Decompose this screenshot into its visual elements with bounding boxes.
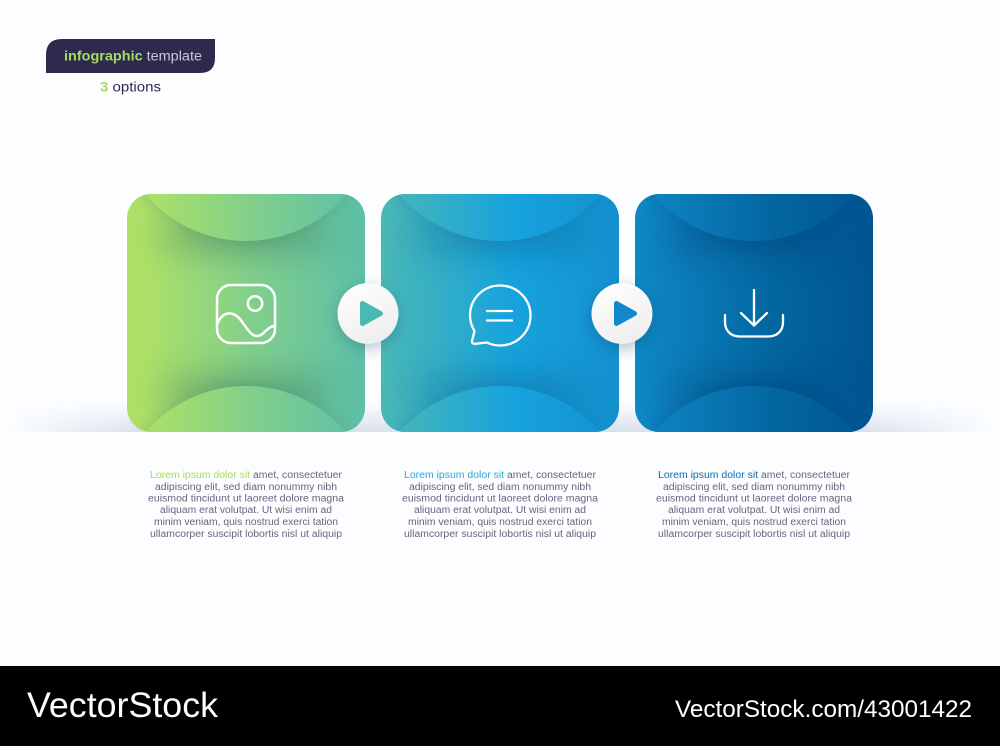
text block 2: aliquam erat volutpat. Ut wisi enim ad	[414, 505, 586, 516]
icon: chat bubble	[470, 286, 530, 346]
text block 3: adipiscing elit, sed diam nonummy nibh	[663, 482, 845, 493]
text block 2	[402, 470, 599, 540]
header badge	[46, 39, 215, 73]
text block 3: aliquam erat volutpat. Ut wisi enim ad	[668, 505, 840, 516]
subtitle: 3 options: 3 options	[100, 80, 161, 94]
text block 2: adipiscing elit, sed diam nonummy nibh	[409, 482, 591, 493]
text block 1: ullamcorper suscipit lobortis nisl ut aliquip	[150, 529, 343, 540]
text block 1: euismod tincidunt ut laoreet dolore magna	[148, 494, 345, 504]
text block 3: ullamcorper suscipit lobortis nisl ut aliquip	[658, 529, 851, 540]
icon: download	[725, 290, 783, 336]
footer logo: VectorStock	[27, 686, 219, 725]
floor shadow	[41, 411, 959, 432]
text block 1: minim veniam, quis nostrud exerci tation	[154, 517, 338, 528]
arrow button 2	[591, 283, 653, 349]
text block 2: euismod tincidunt ut laoreet dolore magna	[402, 494, 599, 504]
panel: card 2 chat	[381, 194, 619, 432]
text block 1	[148, 470, 345, 540]
panel: card 3 download	[635, 194, 873, 432]
icon: play 2	[616, 304, 634, 324]
icon: play 1	[362, 304, 380, 324]
arrow button 1	[337, 283, 399, 349]
text block 3: euismod tincidunt ut laoreet dolore magna	[656, 494, 853, 504]
footer bar	[0, 666, 1000, 746]
text block 3: Lorem ipsum dolor sit amet, consectetuer	[658, 470, 851, 481]
text block 1: Lorem ipsum dolor sit amet, consectetuer	[150, 470, 343, 481]
text block 1: aliquam erat volutpat. Ut wisi enim ad	[160, 505, 332, 516]
icon: image	[217, 285, 275, 343]
panel: card 1 image	[127, 194, 365, 432]
text block 2: minim veniam, quis nostrud exerci tation	[408, 517, 592, 528]
text block 2: Lorem ipsum dolor sit amet, consectetuer	[404, 470, 597, 481]
badge title: infographic template	[64, 48, 202, 64]
text block 2: ullamcorper suscipit lobortis nisl ut aliquip	[404, 529, 597, 540]
footer url: VectorStock.com/43001422	[675, 696, 972, 723]
text block 3: minim veniam, quis nostrud exerci tation	[662, 517, 846, 528]
text block 1: adipiscing elit, sed diam nonummy nibh	[155, 482, 337, 493]
text block 3	[656, 470, 853, 540]
